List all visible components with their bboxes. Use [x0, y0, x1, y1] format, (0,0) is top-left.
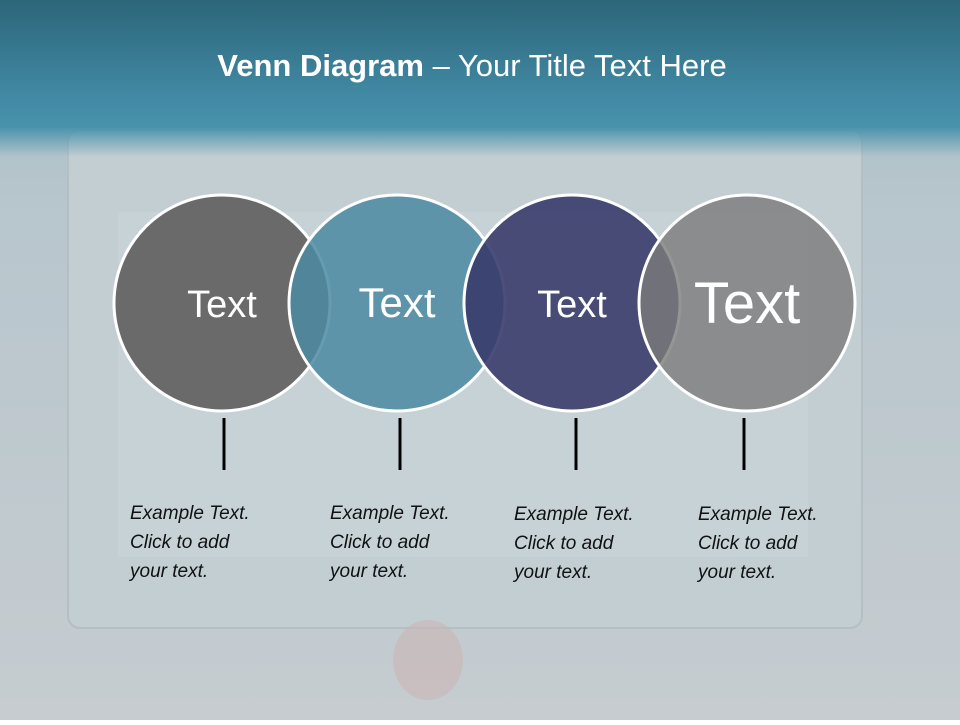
text blocks: [128, 503, 818, 583]
circle 3: Text: [537, 284, 607, 326]
circle 2: [289, 195, 505, 411]
circle 4: [639, 195, 855, 411]
connector lines: [224, 418, 744, 470]
text block 3: Example Text.: [514, 504, 634, 525]
title: Venn Diagram – Your Title Text Here: [217, 48, 727, 83]
text block 4: Click to add: [698, 533, 799, 554]
circle 3: [464, 195, 680, 411]
text block 3: your text.: [512, 562, 592, 583]
text block 4: your text.: [696, 562, 776, 583]
text block 3: Click to add: [514, 533, 615, 554]
text block 4: Example Text.: [698, 504, 818, 525]
text block 1: Example Text.: [130, 503, 250, 524]
text block 2: Click to add: [330, 532, 431, 553]
circle 1: [114, 195, 330, 411]
text block 1: your text.: [128, 561, 208, 582]
circle 2: Text: [358, 279, 436, 326]
text block 2: your text.: [328, 561, 408, 582]
text block 2: Example Text.: [330, 503, 450, 524]
header band: [0, 0, 960, 157]
circle 1: Text: [187, 284, 257, 326]
circle 4: Text: [694, 271, 800, 336]
text block 1: Click to add: [130, 532, 231, 553]
